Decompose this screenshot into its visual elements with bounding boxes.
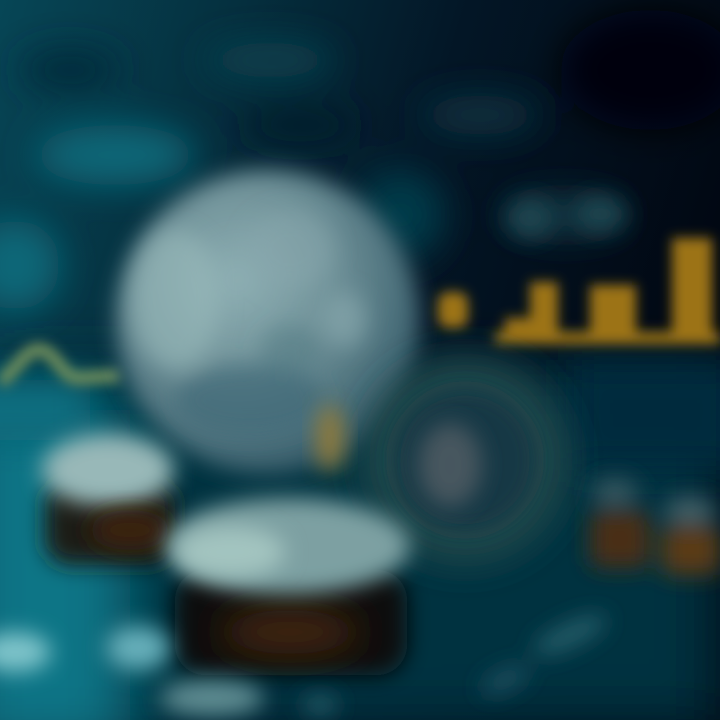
background: cloud patches bbox=[0, 10, 720, 310]
coins: scattered on floor bbox=[0, 607, 611, 716]
globe bbox=[116, 170, 420, 474]
coin: large ring coin at right bbox=[363, 358, 567, 562]
coin: centre emblem bbox=[418, 423, 482, 507]
coin stack: left bbox=[42, 434, 175, 565]
coin stack: front centre bbox=[166, 498, 410, 675]
chart: pale marks above bars bbox=[506, 196, 626, 238]
accent: gold streak beneath globe bbox=[316, 404, 344, 472]
line chart: left wave bbox=[0, 349, 120, 382]
globe: surface mottling bbox=[130, 210, 367, 435]
bar chart: golden bars bbox=[438, 238, 720, 344]
coin stacks: right bbox=[590, 478, 720, 575]
